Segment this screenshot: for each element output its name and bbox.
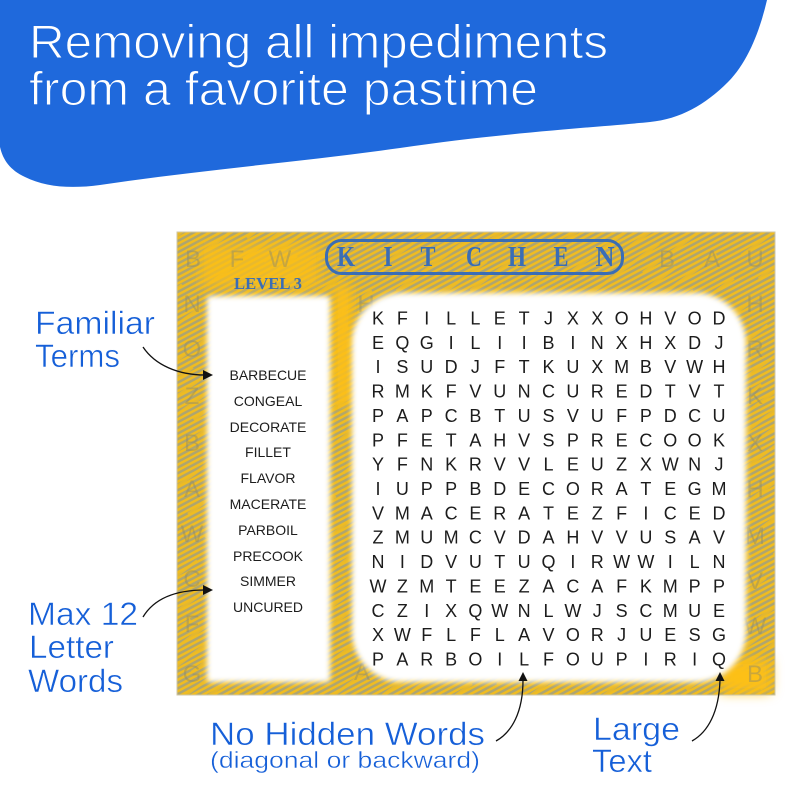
letter grid: M [663,601,678,621]
letter grid: M [614,357,629,377]
letter grid: O [566,650,580,670]
letter grid: M [395,503,410,523]
letter grid: P [372,406,384,426]
letter grid: V [664,357,676,377]
letter grid: K [640,576,652,596]
letter grid: C [445,503,458,523]
letter grid: Q [712,650,726,670]
ghost letters around border: A [354,659,370,686]
letter grid: V [591,528,603,548]
letter grid: V [616,528,628,548]
kitchen heading: N [596,241,615,273]
kitchen heading: K [337,241,355,273]
letter grid: M [419,576,434,596]
letter grid: I [375,479,381,499]
letter grid: S [396,357,408,377]
letter grid: R [591,479,604,499]
title: from a favorite pastime [29,62,538,115]
letter grid: V [567,406,579,426]
letter grid: E [469,503,481,523]
letter grid: I [375,357,381,377]
letter grid: D [493,479,506,499]
letter grid: Z [372,528,384,548]
ghost letters around border: H [357,291,375,318]
letter grid: T [446,576,457,596]
kitchen heading: T [420,241,436,273]
letter grid: F [543,650,554,670]
letter grid: F [616,576,627,596]
letter grid: S [664,528,676,548]
letter grid: K [542,357,555,377]
letter grid: X [567,308,579,328]
callout: familiar terms: Terms [35,338,120,374]
word list: DECORATE [230,419,306,435]
letter grid: T [494,406,505,426]
letter grid: E [372,333,384,353]
letter grid: W [394,625,411,645]
letter grid: S [542,406,555,426]
letter grid: W [662,455,679,475]
letter grid: Q [395,333,409,353]
letter grid: J [471,357,480,377]
letter grid: X [640,455,652,475]
letter grid: T [519,308,530,328]
word list: SIMMER [240,573,296,589]
letter grid: L [495,625,505,645]
letter grid: R [591,552,604,572]
letter grid: E [567,455,579,475]
letter grid: J [617,625,626,645]
letter grid: O [468,650,482,670]
letter grid: L [446,308,456,328]
ghost letters around border: C [183,566,201,593]
letter grid: R [469,455,482,475]
letter grid: D [688,333,701,353]
kitchen heading: E [554,241,568,273]
letter grid: A [396,406,408,426]
letter grid: K [421,382,433,402]
letter grid: E [421,430,433,450]
letter grid: K [713,430,725,450]
letter grid: R [591,382,604,402]
word list: PRECOOK [233,548,304,564]
letter grid: U [639,528,652,548]
letter grid: Q [468,601,482,621]
letter grid: G [420,333,434,353]
word list: BARBECUE [229,367,307,383]
letter grid: B [542,333,555,353]
letter grid: M [663,576,678,596]
letter grid: I [424,601,429,621]
letter grid: H [712,357,726,377]
letter grid: P [445,479,457,499]
letter grid: U [591,455,604,475]
letter grid: O [615,308,629,328]
letter grid: M [712,479,726,499]
letter grid: W [613,552,630,572]
letter grid: G [712,625,726,645]
letter grid: W [491,601,508,621]
letter grid: X [445,601,457,621]
kitchen heading: C [466,241,482,273]
letter grid: P [421,406,433,426]
letter grid: T [494,552,505,572]
letter grid: T [714,382,724,402]
word list: MACERATE [230,496,306,512]
letter grid: J [714,455,724,475]
letter grid: P [640,406,652,426]
letter grid: L [470,308,480,328]
letter grid: Z [616,455,627,475]
letter grid: P [567,430,579,450]
letter grid: E [469,576,481,596]
letter grid: I [692,650,697,670]
letter grid: A [421,503,433,523]
letter grid: U [688,601,701,621]
letter grid: L [543,601,554,621]
letter grid: I [668,552,673,572]
letter grid: C [542,479,555,499]
letter grid: B [469,479,481,499]
callout: max 12 letter words: Max 12 [28,596,138,632]
letter grid: D [712,503,726,523]
letter grid: C [566,576,579,596]
arrow: large text to grid [692,672,724,741]
letter grid: A [542,528,555,548]
letter grid: L [519,650,529,670]
callout: familiar terms: Familiar [35,305,155,341]
letter grid: P [616,650,628,670]
letter grid: B [445,650,457,670]
letter grid: O [688,308,702,328]
kitchen heading: I [384,241,392,273]
letter grid: N [372,552,384,572]
letter grid: O [663,430,677,450]
letter grid: L [470,333,480,353]
letter grid: I [449,333,454,353]
letter grid: F [446,382,457,402]
letter grid: E [664,479,676,499]
letter grid: C [542,382,555,402]
letter grid: U [591,650,604,670]
letter grid: H [639,308,652,328]
kitchen heading [326,240,622,274]
ghost letters around border: G [183,661,201,688]
letter grid: N [420,455,433,475]
letter grid: Q [541,552,556,572]
letter grid: L [543,455,554,475]
letter grid: F [397,308,408,328]
letter grid: C [688,406,701,426]
letter grid: E [616,430,628,450]
letter grid: U [591,406,604,426]
letter grid: W [637,552,654,572]
letter grid: V [542,625,555,645]
letter grid: V [518,455,530,475]
ghost letters around border: Z [185,383,199,410]
letter grid: I [400,552,405,572]
letter grid: C [469,528,482,548]
ghost letters around border: M [745,523,765,550]
ghost letters around border: B [184,430,200,457]
letter grid: E [567,503,579,523]
arrow: no hidden words to grid [496,672,528,741]
letter grid: A [518,625,530,645]
callout: no hidden words [210,716,485,773]
letter grid: T [640,479,651,499]
letter grid: U [566,382,579,402]
letter grid: J [593,601,602,621]
letter grid: P [689,576,701,596]
letter grid: C [445,406,458,426]
blue header banner [0,0,767,187]
letter grid: R [591,625,604,645]
letter grid: N [518,601,531,621]
letter grid: T [665,382,676,402]
letter grid: U [518,552,531,572]
letter grid: A [396,650,408,670]
word list panel [207,296,330,682]
letter grid: A [616,479,628,499]
letter grid: X [372,625,384,645]
letter grid: O [688,430,702,450]
word list: CONGEAL [234,393,302,409]
letter grid: M [444,528,459,548]
letter grid: C [664,503,677,523]
letter grid: U [396,479,409,499]
arrow: max 12 letter words to word list [143,585,213,617]
letter grid: J [714,333,724,353]
letter grid: I [570,552,575,572]
callout: familiar terms [35,305,155,374]
letter grid: P [372,430,384,450]
word list: PARBOIL [238,522,298,538]
ghost letters around border: U [746,246,764,273]
ghost letters around border: W [181,521,204,548]
letter grid: W [686,357,703,377]
letter grid: U [493,382,506,402]
letter grid: V [713,528,725,548]
ghost letters around border: K [747,383,763,410]
letter grid: N [712,552,726,572]
kitchen heading: H [508,241,526,273]
letter grid: F [494,357,505,377]
letter grid: X [616,333,628,353]
letter grid: V [469,382,481,402]
letter grid: R [664,650,677,670]
letter grid: D [712,308,726,328]
letter grid: V [494,528,506,548]
letter grid: E [713,601,725,621]
letter grid: C [372,601,384,621]
letter grid: N [688,455,701,475]
ghost letters around border [181,246,767,688]
letter grid: N [591,333,604,353]
letter grid: P [372,650,384,670]
callout: max 12 letter words: Words [28,663,123,699]
letter grid: F [397,455,408,475]
letter grid: D [518,528,531,548]
ghost letters around border: W [269,246,292,273]
letter grid: C [639,601,652,621]
letter grid: K [372,308,384,328]
letter grid: X [591,357,603,377]
letter grid: U [469,552,482,572]
letter grid: X [591,308,603,328]
callout: large text [592,711,680,779]
letter grid: Z [592,503,603,523]
ghost letters around border: B [185,246,201,273]
ghost letters around border: V [747,568,763,595]
letter grid: A [518,503,530,523]
letter grid: R [591,430,604,450]
letter grid: K [445,455,457,475]
letter grid: O [566,625,580,645]
letter grid: M [395,528,410,548]
ghost letters around border: H [746,476,764,503]
callout: large text: Large [593,711,680,747]
ghost letters around border: B [747,661,763,688]
letter grid: A [542,576,555,596]
title: Removing all impediments [29,15,608,68]
letter grid: Z [519,576,530,596]
letter grid: A [689,528,701,548]
letter grid: D [639,382,652,402]
letter grid: E [689,503,701,523]
letter grid: J [544,308,553,328]
letter grid: Y [372,455,384,475]
letter grid: C [639,430,652,450]
letter grid: W [564,601,581,621]
letter grid: I [570,333,575,353]
letter grid panel [352,293,746,682]
letter grid: P [421,479,433,499]
letter grid: S [542,430,555,450]
ghost letters around border: B [659,246,675,273]
letter grid: S [616,601,628,621]
letter grid: G [688,479,702,499]
letter grid: U [566,357,579,377]
board background with hatching [177,232,775,695]
letter grid: I [497,333,502,353]
letter grid: I [643,503,648,523]
word list: UNCURED [233,599,303,615]
arrow: familiar terms to word list [143,347,213,380]
letter grid: D [664,406,677,426]
letter grid: V [518,430,530,450]
word list: FILLET [245,444,291,460]
letter grid: X [664,333,676,353]
ghost letters around border: A [184,476,200,503]
letter grid: R [372,382,384,402]
letter grid: V [689,382,701,402]
letter grid: L [446,625,456,645]
letter grid: M [395,382,410,402]
callout: max 12 letter words: Letter [29,629,114,665]
letter grid: I [643,650,648,670]
letter grid: U [712,406,726,426]
letter grid: F [397,430,408,450]
letter grid: Z [397,576,408,596]
letter grid: H [493,430,506,450]
letter grid [370,308,726,670]
letter grid: R [493,503,506,523]
letter grid: P [713,576,725,596]
letter grid: U [420,357,433,377]
callout: no hidden words: (diagonal or backward) [210,747,480,773]
letter grid: T [519,357,530,377]
letter grid: W [370,576,386,596]
word list: FLAVOR [241,470,295,486]
letter grid: E [494,308,506,328]
ghost letters around border: N [183,291,201,318]
letter grid: A [469,430,481,450]
word list [229,367,307,615]
letter grid: F [616,406,627,426]
letter grid: V [494,455,506,475]
callout: no hidden words: No Hidden Words [210,716,485,752]
ghost letters around border: X [747,430,763,457]
letter grid: T [446,430,457,450]
letter grid: I [424,308,429,328]
letter grid: I [497,650,502,670]
letter grid: D [420,552,433,572]
letter grid: T [543,503,554,523]
letter grid: D [445,357,458,377]
letter grid: N [518,382,531,402]
letter grid: U [420,528,433,548]
letter grid: H [639,333,652,353]
ghost letters around border: O [183,336,201,363]
callout: max 12 letter words [28,596,138,699]
letter grid: I [522,333,527,353]
ghost letters around border: F [185,611,199,638]
letter grid: V [372,503,384,523]
ghost letters around border: W [744,613,767,640]
letter grid: E [494,576,506,596]
letter grid: A [591,576,603,596]
letter grid: O [566,479,580,499]
letter grid: E [664,625,676,645]
title [29,15,608,115]
callout: large text: Text [592,743,652,779]
letter grid: U [639,625,652,645]
letter grid: B [469,406,481,426]
letter grid: F [470,625,481,645]
ghost letters around border: R [746,336,764,363]
letter grid: E [616,382,628,402]
level label: LEVEL 3 [234,274,302,293]
ghost letters around border: H [746,291,764,318]
letter grid: S [689,625,701,645]
letter grid: B [640,357,652,377]
ghost letters around border: F [230,246,244,273]
ghost letters around border: A [704,246,720,273]
letter grid: H [566,528,579,548]
letter grid: Z [397,601,408,621]
letter grid: R [420,650,433,670]
puzzle board [177,232,775,695]
letter grid: E [518,479,530,499]
letter grid: V [664,308,676,328]
letter grid: U [518,406,531,426]
letter grid: V [445,552,457,572]
letter grid: F [421,625,432,645]
letter grid: L [690,552,700,572]
letter grid: F [616,503,627,523]
